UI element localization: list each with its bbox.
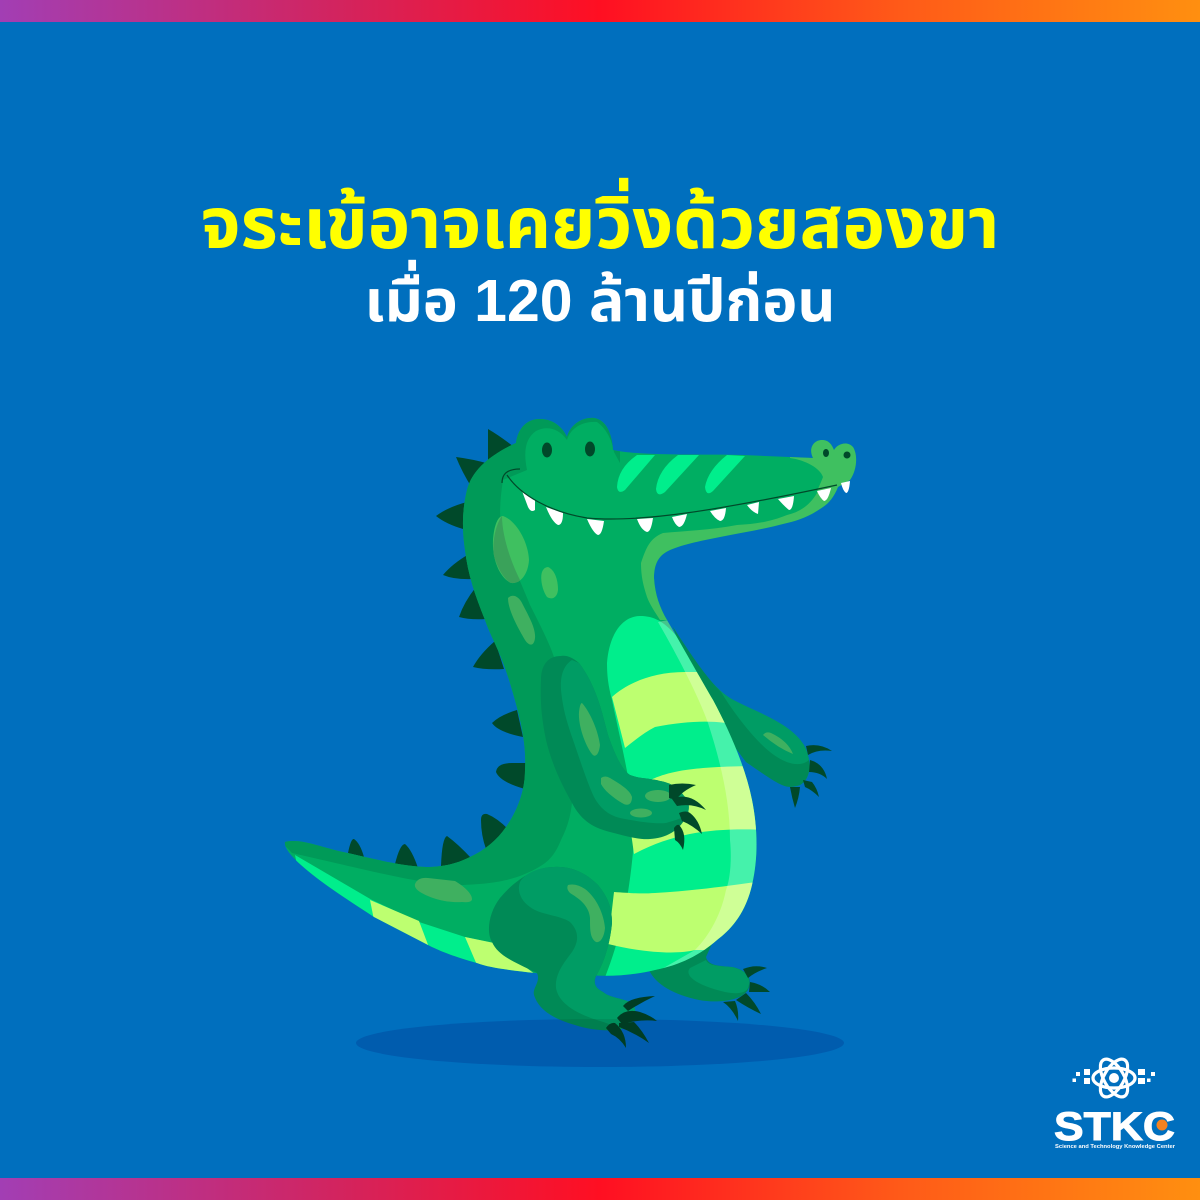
belly sheen (658, 620, 756, 968)
body (284, 418, 856, 976)
near arm spots (579, 703, 671, 818)
ground shadow (356, 1019, 844, 1067)
illustration canvas (284, 418, 1175, 1149)
far arm claws (790, 745, 832, 808)
head bumps (525, 422, 620, 470)
back spikes (348, 429, 527, 868)
crocodile (270, 400, 870, 1048)
eyes and nostrils (542, 442, 850, 458)
hind leg (415, 867, 657, 1048)
belly (606, 616, 756, 976)
body base (284, 418, 856, 976)
title line 1: จระเข้อาจเคยวิ่งด้วยสองขา (201, 184, 999, 264)
mouth line (502, 469, 837, 519)
leg spot (567, 884, 605, 942)
near arm claws (669, 784, 706, 850)
title line 2: เมื่อ 120 ล้านปีก่อน (365, 268, 835, 334)
far arm (673, 627, 832, 808)
teeth (522, 481, 850, 535)
tail underside (295, 855, 540, 980)
logo tagline: Science and Technology Knowledge Center (1055, 1144, 1176, 1150)
STKC logo (1054, 1055, 1176, 1150)
snout stripes (617, 455, 745, 494)
foot in shadow (560, 1019, 620, 1030)
bottom gradient bar (0, 1178, 1200, 1200)
back shading (270, 400, 620, 885)
belly stripes (370, 672, 770, 978)
tail spot (415, 878, 472, 902)
top gradient bar (0, 0, 1200, 22)
far foot (648, 935, 770, 1021)
near arm (541, 656, 706, 850)
far arm spot (763, 732, 793, 754)
logo orange dot (1156, 1120, 1168, 1130)
logo atom icon (1072, 1055, 1155, 1101)
neck spots (493, 516, 558, 645)
logo wordmark: STKC (1054, 1105, 1175, 1149)
far foot claws (723, 966, 770, 1021)
front foot claws (606, 996, 657, 1048)
snout tip and lower lip (641, 440, 856, 620)
